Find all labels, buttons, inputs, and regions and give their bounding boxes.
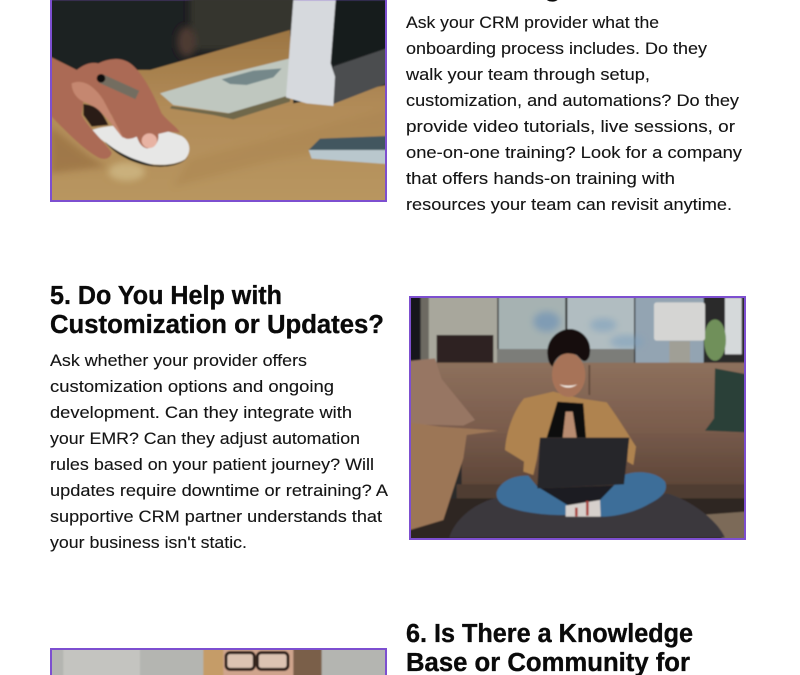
heading: section 5: 5. Do You Help with — [50, 282, 282, 310]
desk — [50, 30, 387, 203]
jacket — [505, 392, 636, 475]
text block: customization questions: rules based on your patient journey? Will — [50, 455, 374, 474]
legs — [540, 484, 614, 504]
socks — [566, 500, 601, 517]
monitor foot — [309, 136, 387, 151]
text block: customization questions — [50, 351, 389, 552]
photo: hand on mouse at desk — [50, 0, 387, 203]
photo: woman with glasses (clipped at bottom edge) — [50, 648, 387, 675]
text block: customization questions: supportive CRM partner understands that — [50, 507, 382, 526]
text block: onboarding questions: customization, and automations? Do they — [406, 91, 740, 110]
text block: customization questions: your EMR? Can they adjust automation — [50, 429, 360, 448]
black top — [547, 402, 586, 438]
heading: section 6 — [406, 620, 693, 675]
keyboard — [160, 58, 290, 113]
text block: customization questions: your business isn't static. — [50, 533, 247, 552]
text block: onboarding questions — [405, 13, 743, 214]
text block: onboarding questions: Ask your CRM provider what the — [406, 13, 659, 32]
laptop — [537, 438, 629, 488]
plant — [704, 319, 726, 361]
fingernail — [142, 133, 157, 148]
text block: customization questions: customization options and ongoing — [50, 377, 334, 396]
pen — [101, 78, 137, 95]
heading: section 6: 6. Is There a Knowledge — [406, 620, 693, 648]
text block: onboarding questions: walk your team through setup, — [405, 65, 650, 84]
text block: onboarding questions: resources your team can revisit anytime. — [406, 195, 732, 214]
lamp — [654, 302, 705, 341]
sofa back — [410, 363, 747, 438]
sofa seat — [462, 433, 747, 485]
text block: customization questions: Ask whether your provider offers — [50, 351, 307, 370]
hand — [50, 57, 180, 159]
head and hair — [552, 353, 585, 397]
text block: onboarding questions: that offers hands-on training with — [406, 169, 675, 188]
text block: onboarding questions: onboarding process includes. Do they — [406, 39, 708, 58]
blanket — [410, 422, 498, 530]
text block: customization questions: updates require downtime or retraining? A — [50, 481, 389, 500]
cushions — [410, 358, 475, 426]
text block: onboarding questions: one-on-one training? Look for a company — [406, 143, 743, 162]
pouf — [449, 493, 725, 538]
text block: onboarding questions: provide video tutorials, live sessions, or — [406, 117, 735, 136]
photo: woman with laptop on floor cushion — [409, 296, 747, 542]
heading: section 5 — [50, 282, 384, 339]
mouse — [90, 125, 189, 165]
text block: customization questions: development. Can they integrate with — [50, 403, 352, 422]
monitor stand — [336, 20, 337, 21]
heading: section 5: Customization or Updates? — [50, 311, 384, 339]
